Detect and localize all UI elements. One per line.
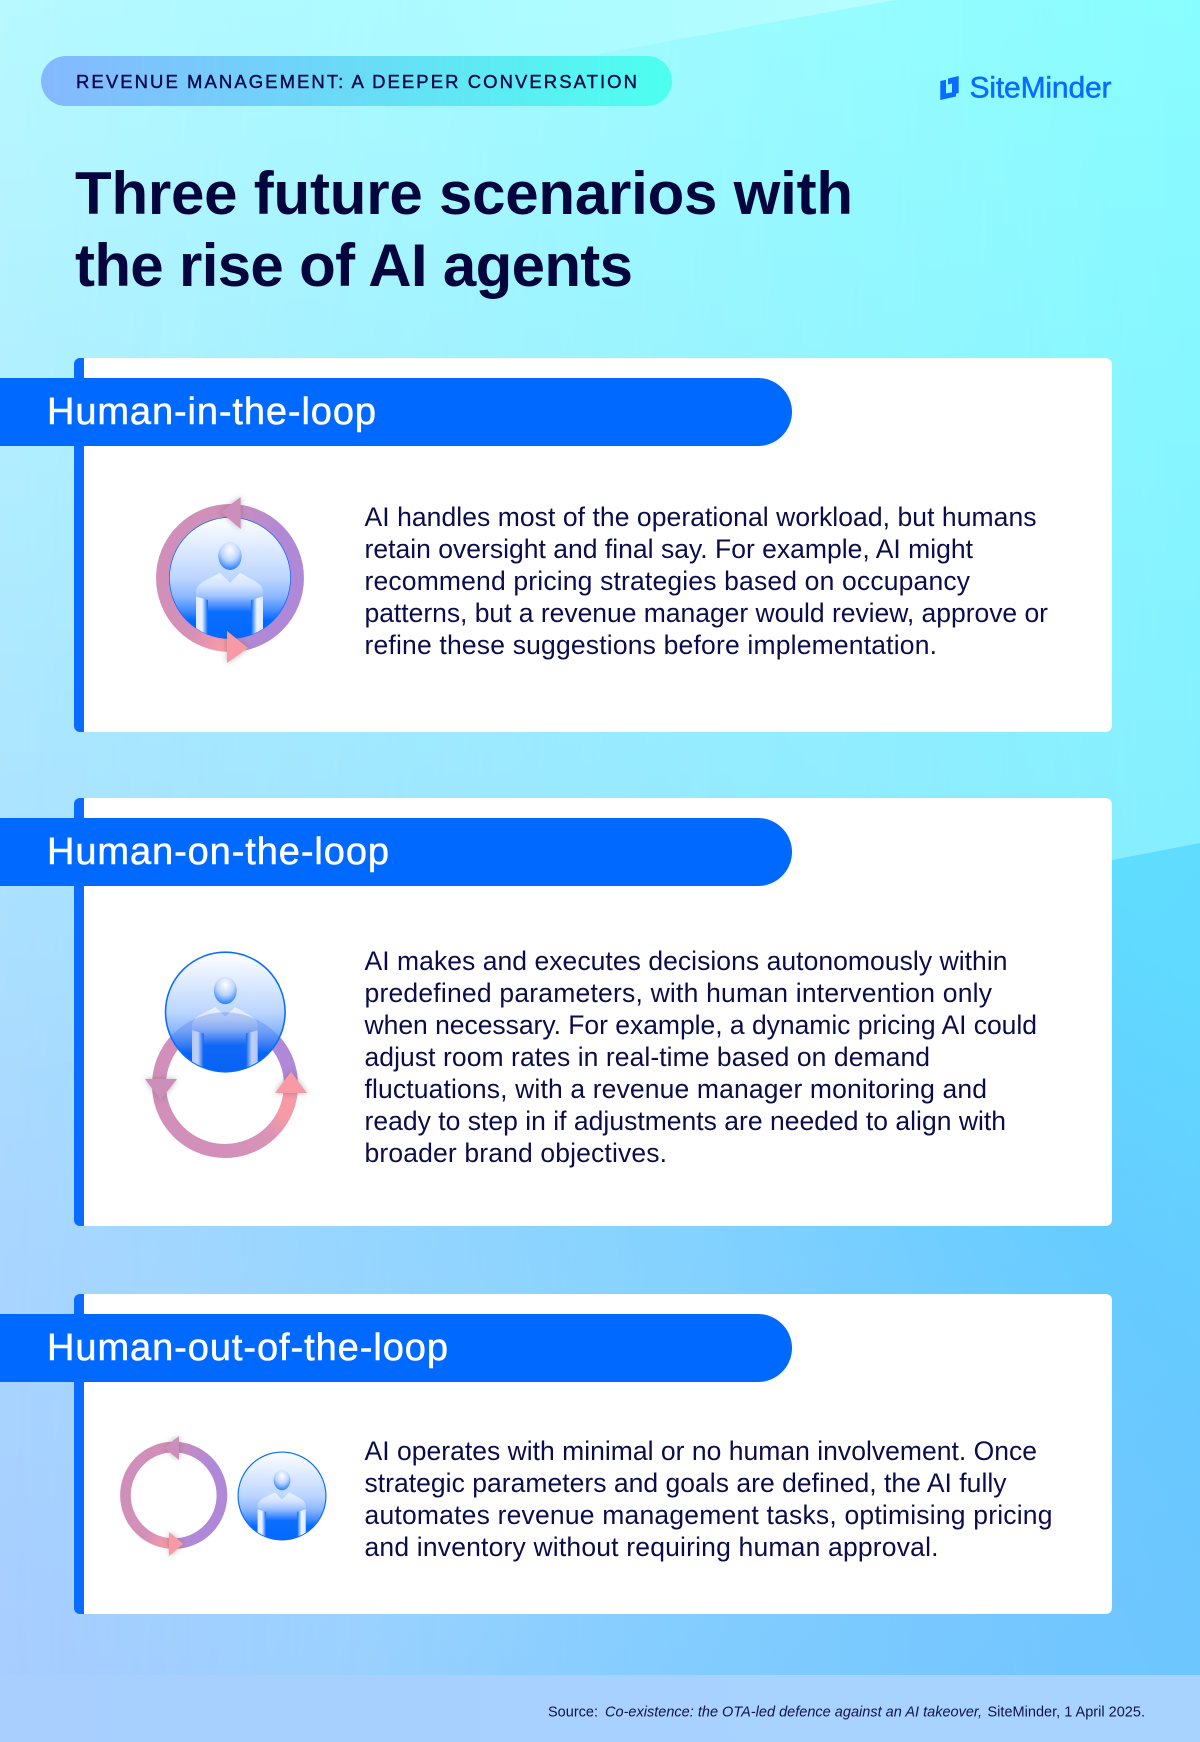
- card: [74, 358, 1112, 732]
- text block: and inventory without requiring human approval.: [364, 1532, 938, 1562]
- text block: AI operates with minimal or no human involvement. Once: [364, 1436, 1037, 1466]
- logo: SiteMinder: SiteMinder: [970, 72, 1112, 105]
- panel: human-out-of-the-loop: [0, 1294, 1112, 1614]
- heading: [0, 1314, 792, 1382]
- text block: when necessary. For example, a dynamic pricing AI could: [364, 1010, 1037, 1040]
- panel: human-in-the-loop: [0, 358, 1112, 732]
- source note: SiteMinder, 1 April 2025.: [988, 1704, 1145, 1720]
- text block: refine these suggestions before implementation.: [364, 630, 937, 660]
- panel: human-on-the-loop: [0, 798, 1112, 1226]
- text block: automates revenue management tasks, optimising pricing: [364, 1500, 1052, 1530]
- card: [74, 1294, 1112, 1614]
- icon: person inside loop: [163, 497, 297, 663]
- text block: [364, 946, 1037, 1168]
- icon: SiteMinder mark: [940, 76, 959, 100]
- text block: ready to step in if adjustments are needed to align with: [364, 1106, 1006, 1136]
- text block: [364, 1436, 1052, 1562]
- card: [74, 798, 1112, 1226]
- title: Three future scenarios with: [75, 160, 853, 227]
- text block: predefined parameters, with human intervention only: [364, 978, 993, 1008]
- heading: [0, 378, 792, 446]
- title: the rise of AI agents: [75, 232, 633, 299]
- heading: Human-on-the-loop: [47, 831, 389, 873]
- source note: Co-existence: the OTA-led defence against an AI takeover,: [605, 1704, 982, 1720]
- icon: person on loop: [145, 952, 307, 1158]
- source note: [548, 1704, 1145, 1720]
- text block: fluctuations, with a revenue manager monitoring and: [364, 1074, 987, 1104]
- text block: patterns, but a revenue manager would review, approve or: [364, 598, 1048, 628]
- text block: recommend pricing strategies based on occupancy: [364, 566, 971, 596]
- text block: adjust room rates in real-time based on demand: [364, 1042, 930, 1072]
- text block: retain oversight and final say. For example, AI might: [364, 534, 974, 564]
- text block: AI makes and executes decisions autonomously within: [364, 946, 1008, 976]
- title: [75, 160, 853, 299]
- heading: [0, 818, 792, 886]
- source note: Source:: [548, 1704, 598, 1720]
- heading: Human-out-of-the-loop: [47, 1327, 448, 1369]
- category pill: [41, 56, 672, 106]
- footer band: [0, 1675, 1200, 1742]
- category pill: REVENUE MANAGEMENT: A DEEPER CONVERSATION: [76, 71, 637, 92]
- heading: Human-in-the-loop: [47, 391, 376, 433]
- text block: broader brand objectives.: [364, 1138, 667, 1168]
- icon: loop beside person: [125, 1436, 326, 1556]
- text block: strategic parameters and goals are defined, the AI fully: [364, 1468, 1007, 1498]
- text block: AI handles most of the operational workload, but humans: [364, 502, 1036, 532]
- text block: [364, 502, 1048, 660]
